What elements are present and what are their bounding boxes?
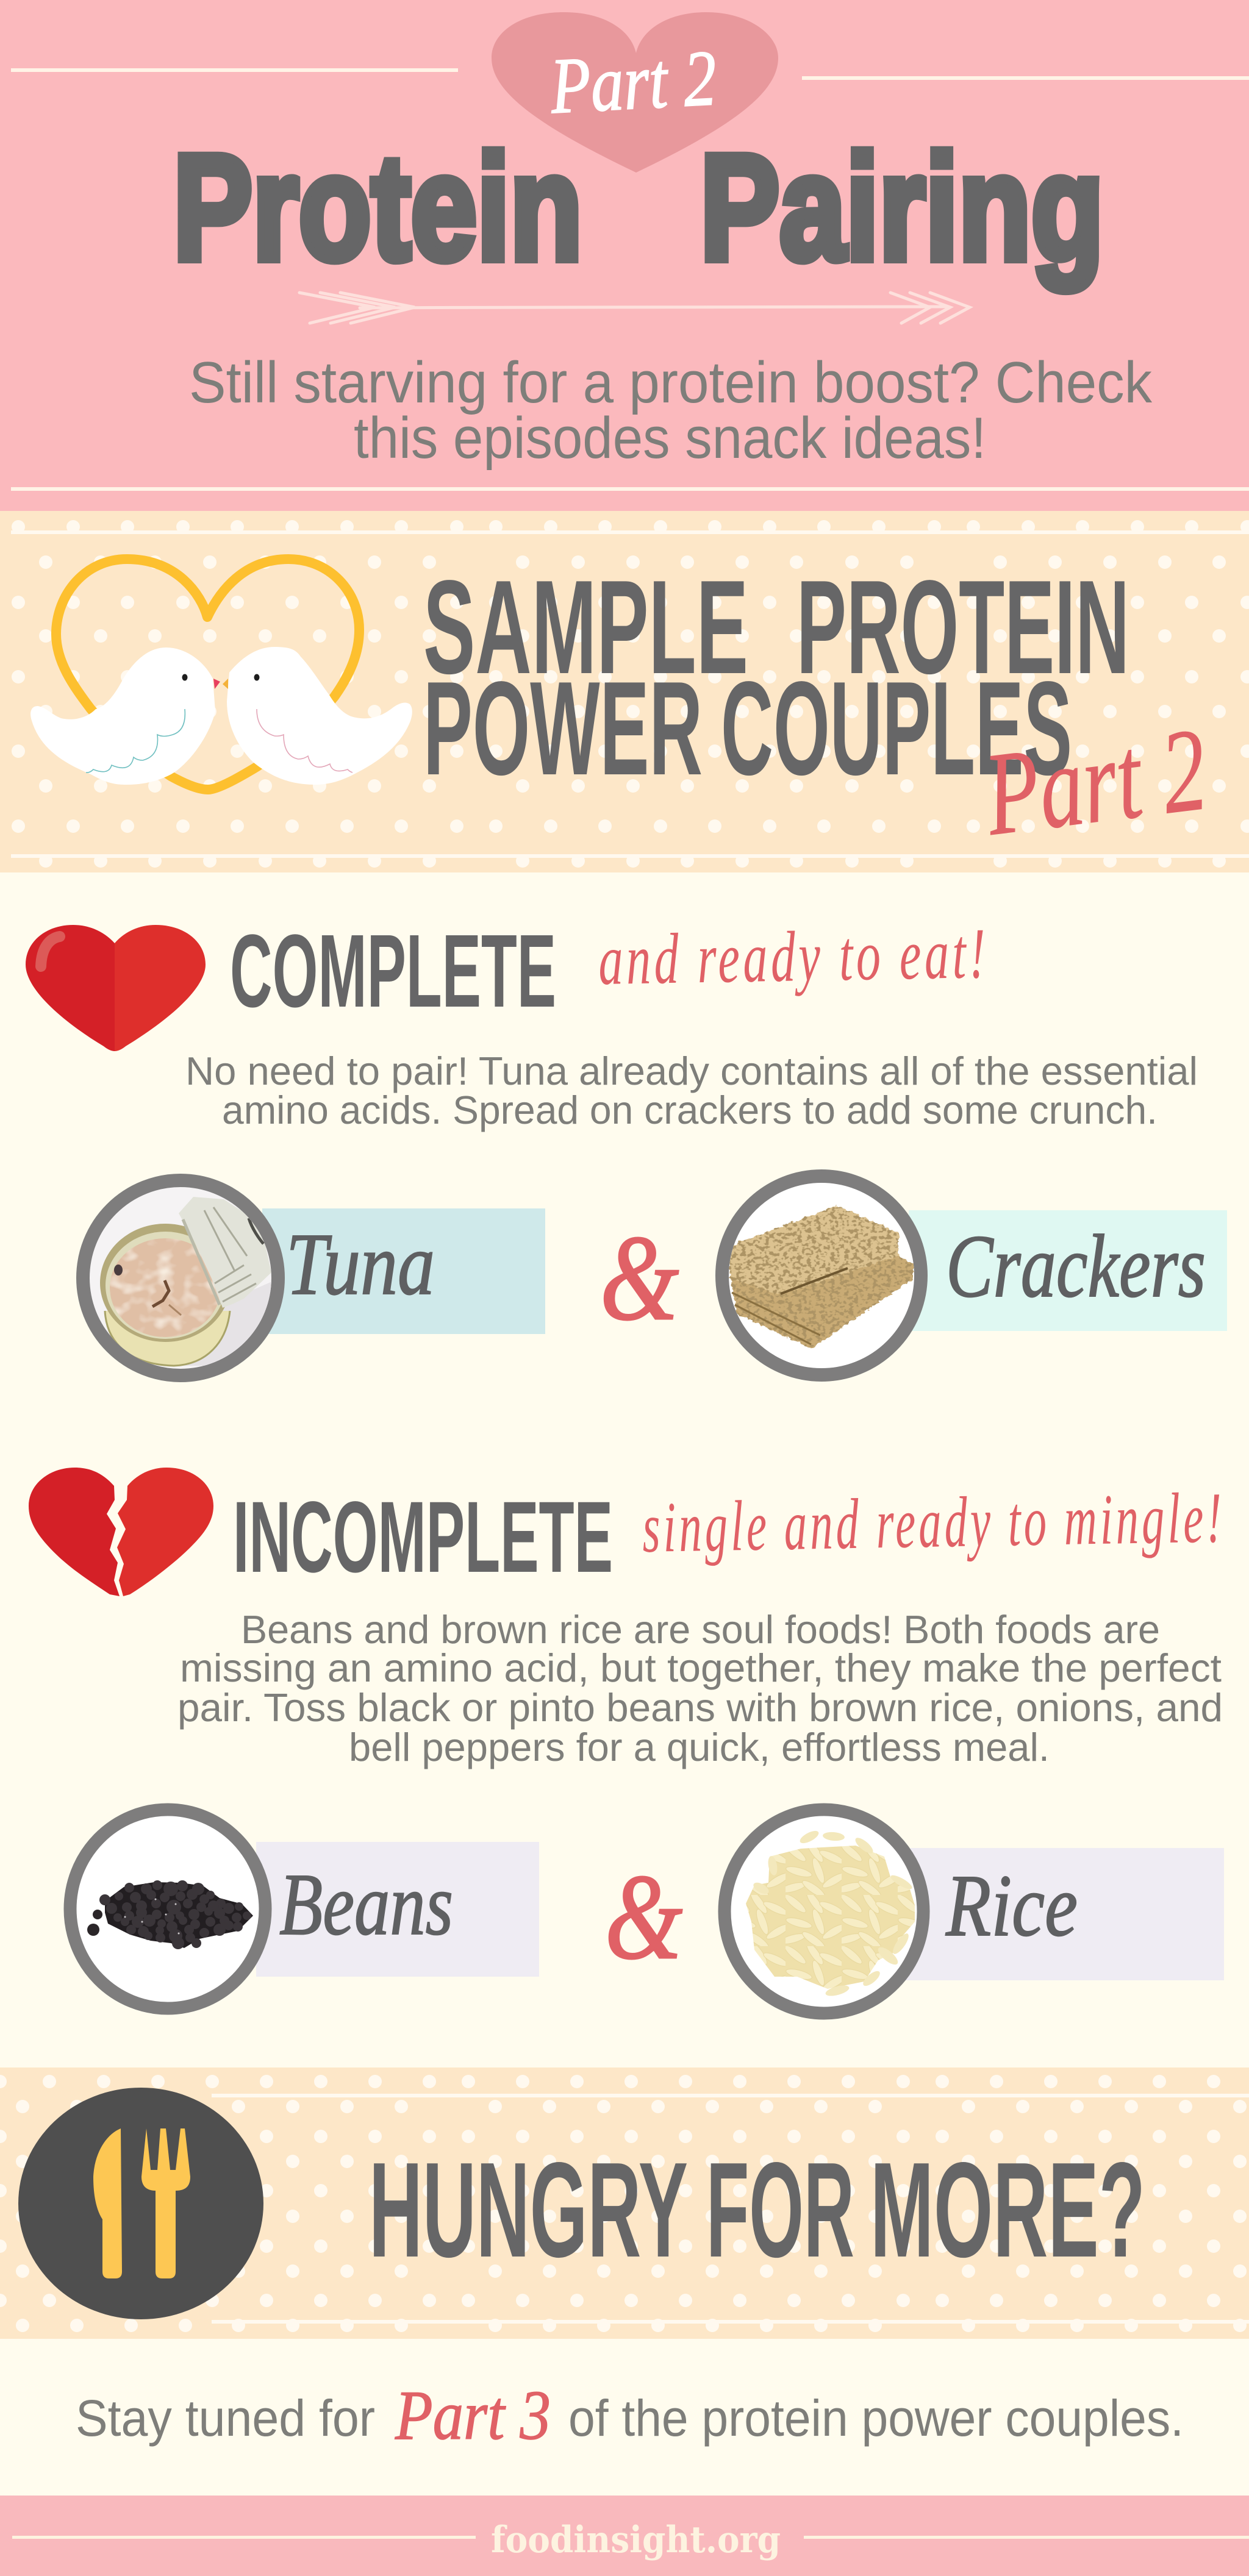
ampersand: &: [600, 1211, 679, 1346]
icon: beans: [70, 1810, 265, 2008]
description: [185, 1049, 1198, 1132]
label band: rice: Rice: [945, 1857, 1078, 1955]
description: bell peppers for a quick, effortless meal.: [349, 1725, 1050, 1769]
ampersand: &: [605, 1850, 682, 1985]
icon: red heart: [26, 925, 206, 1051]
title: [173, 124, 1104, 291]
heading: complete: COMPLETE: [230, 913, 556, 1029]
heading: FOR: [706, 2135, 854, 2286]
label band: beans: [256, 1842, 539, 1977]
icon: fork and knife: [18, 2088, 263, 2319]
description: amino acids. Spread on crackers to add some crunch.: [222, 1088, 1158, 1132]
subtitle: Still starving for a protein boost? Check: [189, 350, 1153, 415]
title: Pairing: [700, 124, 1104, 291]
heading: POWER: [423, 654, 703, 803]
panel: sample protein power couples banner: [0, 511, 1249, 872]
icon: broken heart: [29, 1468, 213, 1596]
icon: tuna can: [83, 1180, 278, 1375]
label band: beans: Beans: [279, 1856, 453, 1953]
title: Protein: [173, 124, 582, 291]
closing line: [76, 2377, 1184, 2454]
label band: tuna: [262, 1208, 545, 1334]
icon: heart: [492, 12, 778, 173]
heading: incomplete: INCOMPLETE: [233, 1481, 613, 1594]
tagline: and ready to eat!: [598, 913, 989, 1000]
arrow: [299, 293, 970, 323]
closing line: Part 3: [395, 2377, 551, 2454]
closing line: Stay tuned for: [76, 2389, 375, 2447]
subtitle: this episodes snack ideas!: [354, 405, 986, 471]
subtitle: [189, 350, 1153, 471]
icon: yellow heart outline: [56, 559, 359, 790]
closing line: of the protein power couples.: [568, 2389, 1184, 2447]
description: missing an amino acid, but together, they make the perfect: [180, 1646, 1222, 1690]
description: No need to pair! Tuna already contains all of the essential: [185, 1049, 1198, 1093]
panel: incomplete: [29, 1468, 1225, 2013]
description: [177, 1607, 1223, 1769]
heading: HUNGRY: [369, 2135, 688, 2286]
panel: complete: [26, 913, 1227, 1375]
panel: hungry for more banner: [0, 2068, 1249, 2339]
panel: header: [0, 0, 1249, 511]
heading: SAMPLE: [423, 553, 748, 702]
icon: crackers: [722, 1176, 921, 1375]
label band: crackers: [909, 1210, 1227, 1331]
description: pair. Toss black or pinto beans with brown rice, onions, and: [177, 1685, 1223, 1730]
label band: rice: [903, 1848, 1224, 1980]
website: foodinsight.org: [491, 2519, 781, 2561]
heading: [423, 553, 1129, 803]
icon: right bird: [223, 647, 412, 785]
icon: left bird: [30, 648, 220, 785]
part 2 label: Part 2: [548, 34, 718, 130]
description: Beans and brown rice are soul foods! Both foods are: [241, 1607, 1160, 1652]
icon: rice: [725, 1810, 923, 2013]
label band: tuna: Tuna: [286, 1216, 435, 1313]
panel: footer: [0, 2496, 1249, 2576]
